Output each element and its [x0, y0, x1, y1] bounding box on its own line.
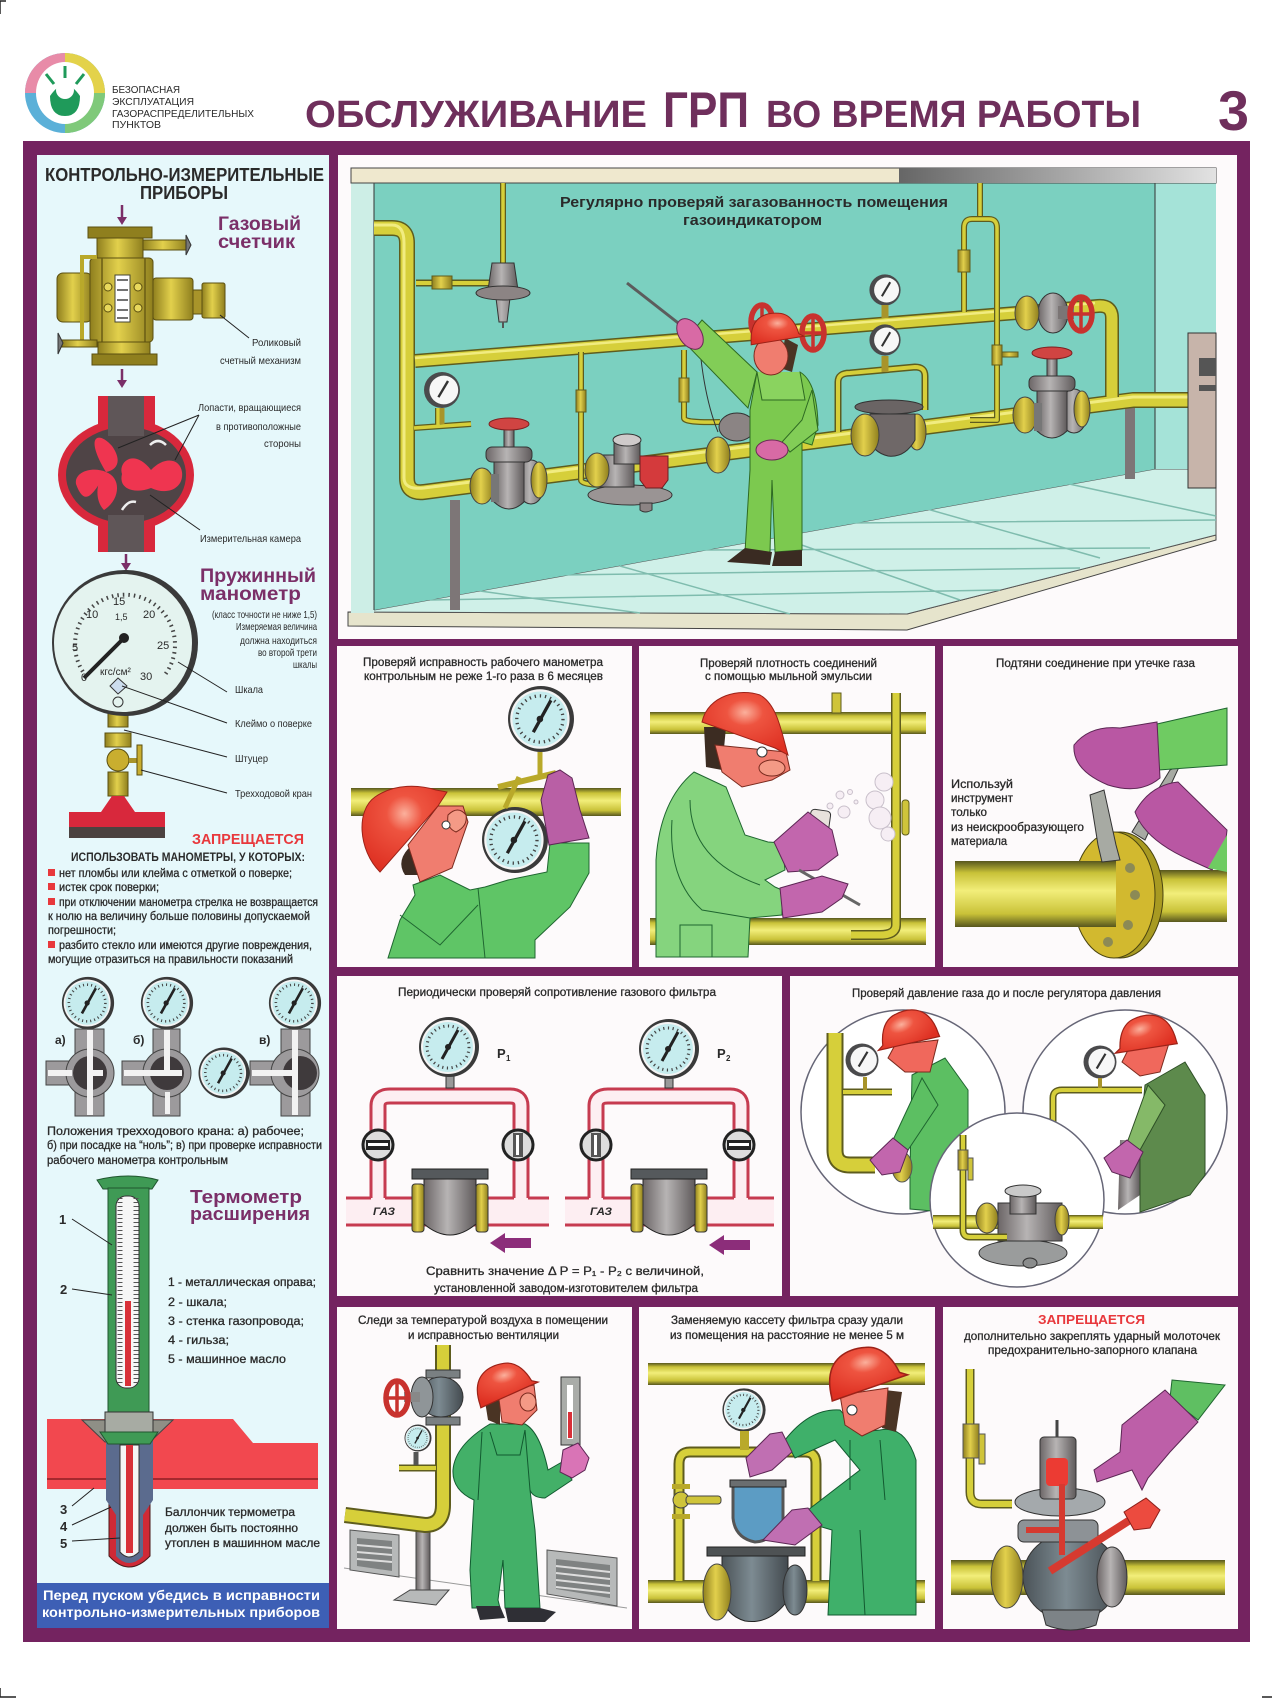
text: tool note: только — [951, 805, 987, 819]
icon: gas meter — [57, 205, 225, 388]
text: hammer rule: предохранительно-запорного клапана — [988, 1343, 1197, 1357]
callouts: gauge parts — [122, 662, 312, 800]
callouts: gauge parts: Шкала — [235, 684, 263, 696]
callouts: thermometer numbers: 2 — [60, 1282, 67, 1297]
panel: check working gauge: Проверяй исправность рабочего манометра — [363, 655, 603, 669]
text: gauge prohibition list: ИСПОЛЬЗОВАТЬ МАНОМЕТРЫ, У КОТОРЫХ: — [71, 850, 305, 864]
text: gauge prohibition list: при отключении манометра стрелка не возвращается — [59, 895, 318, 909]
callouts: thermometer numbers: 3 — [60, 1502, 67, 1517]
callout: roller counter — [220, 315, 301, 367]
floor — [348, 469, 1216, 630]
text: gauge class note: во второй трети — [258, 647, 317, 659]
text: tool note: инструмент — [951, 791, 1013, 805]
callout: measuring chamber — [150, 495, 301, 545]
diagram: filter before: 1 — [506, 1054, 511, 1063]
text: tool note: из неискрообразующего — [951, 820, 1084, 834]
poster number: 3 — [1218, 79, 1249, 142]
text: gauge class note: должна находиться — [240, 635, 317, 647]
diagram: filter before: P — [497, 1046, 506, 1061]
main title: ОБСЛУЖИВАНИЕ — [305, 94, 647, 136]
ceiling beam — [351, 168, 1216, 183]
heading: gas meter: Газовый — [218, 214, 301, 235]
icon: spring pressure gauge: 25 — [157, 640, 169, 652]
text: gauge prohibition list — [48, 850, 318, 966]
pointing hand — [1094, 1380, 1225, 1490]
panel: check working gauge — [337, 646, 632, 967]
heading: instruments — [45, 165, 324, 203]
soap foam — [827, 773, 895, 841]
text: valve positions — [47, 1124, 322, 1167]
callout: rotating lobes: в противоположные — [216, 421, 301, 433]
diagram: filter after: P — [717, 1046, 726, 1061]
heading: spring gauge: Пружинный — [200, 566, 316, 587]
chart: expansion thermometer — [47, 1176, 318, 1567]
text: thermometer note: утоплен в машинном масле — [165, 1536, 320, 1550]
series title — [112, 84, 254, 131]
safety shutoff valve — [991, 1420, 1160, 1630]
text: gauge class note — [212, 609, 317, 671]
icon: flange and regulator on right — [706, 400, 926, 473]
pipes — [650, 693, 926, 945]
heading: scene instruction: Регулярно проверяй загазованность помещения — [560, 194, 948, 211]
panel: temperature and ventilation — [337, 1307, 632, 1629]
panel: regulator pressure check: Проверяй давление газа до и после регулятора давления — [852, 986, 1161, 1000]
panel: instruments — [37, 155, 329, 1628]
series title: ЭКСПЛУАТАЦИЯ — [112, 96, 194, 108]
legend: thermometer parts: 4 - гильза; — [168, 1333, 229, 1347]
worker with gas indicator — [627, 283, 818, 566]
icon: regulator with red cap — [585, 434, 672, 512]
flanged pipe — [955, 832, 1227, 958]
panel: soap leak test: Проверяй плотность соединений — [700, 656, 877, 670]
callout: roller counter: счетный механизм — [220, 355, 301, 367]
diagram: filter after — [565, 1019, 774, 1255]
icon: gate valves — [470, 347, 1090, 509]
main title: ВО ВРЕМЯ РАБОТЫ — [766, 94, 1141, 136]
text: gauge class note: шкалы — [293, 659, 317, 671]
panel: temperature and ventilation: Следи за температурой воздуха в помещении — [358, 1313, 608, 1327]
diagram: filter before: ГАЗ — [373, 1206, 395, 1218]
text: thermometer note: должен быть постоянно — [165, 1521, 298, 1535]
pipes — [648, 1363, 925, 1603]
callout: roller counter: Роликовый — [252, 337, 301, 349]
heading: spring gauge — [200, 566, 316, 605]
text: compare formula: Сравнить значение Δ P = P₁ - P₂ с величиной, — [426, 1264, 704, 1278]
icon: wall gauges — [424, 274, 901, 424]
legend: thermometer parts: 1 - металлическая оправа; — [168, 1275, 316, 1289]
inset: worker left — [801, 1002, 1005, 1214]
text: valve positions: Положения трехходового крана: а) рабочее; — [47, 1124, 304, 1138]
pipe — [351, 788, 621, 816]
main title — [305, 82, 1141, 138]
text: compare formula — [426, 1264, 704, 1295]
electrical cabinet — [1188, 333, 1216, 488]
text: hammer rule: дополнительно закреплять ударный молоточек — [964, 1329, 1221, 1343]
worker — [656, 692, 860, 957]
inset: worker right — [1023, 1008, 1227, 1214]
text: tool note: материала — [951, 834, 1007, 848]
callout: blue note: Перед пуском убедись в исправности — [43, 1588, 320, 1603]
main title: ГРП — [663, 82, 749, 138]
icon: three-way valve c with control gauge — [198, 977, 321, 1116]
panel: replace filter cassette: Заменяемую кассету фильтра сразу удали — [671, 1313, 903, 1327]
callout: measuring chamber: Измерительная камера — [200, 533, 301, 545]
text: gauge prohibition list: истек срок поверки; — [59, 880, 159, 894]
text: gauge class note: (класс точности не ниже 1,5) — [212, 609, 317, 621]
text: gauge class note: Измеряемая величина — [236, 621, 317, 633]
warning heading: ЗАПРЕЩАЕТСЯ — [192, 831, 304, 848]
text: thermometer note: Баллончик термометра — [165, 1505, 295, 1519]
icon: gauges and fitting — [482, 686, 574, 873]
heading: instruments: КОНТРОЛЬНО-ИЗМЕРИТЕЛЬНЫЕ — [45, 165, 324, 185]
heading: thermometer: расширения — [190, 1204, 310, 1224]
icon: spring pressure gauge — [52, 570, 198, 838]
icon: spring pressure gauge: кгс/см² — [100, 667, 131, 678]
series title: БЕЗОПАСНАЯ — [112, 84, 180, 96]
text: gauge prohibition list: разбито стекло или имеются другие повреждения, — [59, 938, 312, 952]
panel: room scene — [338, 155, 1237, 639]
callout: blue note — [37, 1583, 329, 1628]
series title: ГАЗОРАСПРЕДЕЛИТЕЛЬНЫХ — [112, 108, 254, 120]
worker — [362, 770, 589, 958]
text: valve positions: рабочего манометра контрольным — [47, 1153, 228, 1167]
panel: prohibition hammer — [943, 1307, 1238, 1630]
callouts: thermometer numbers: 1 — [59, 1212, 66, 1227]
icon: spring pressure gauge: 5 — [72, 642, 78, 654]
callouts: thermometer numbers: 5 — [60, 1536, 67, 1551]
heading: scene instruction — [560, 194, 948, 229]
text: gauge prohibition list: к нолю на величину больше половины допускаемой — [48, 909, 310, 923]
legend: thermometer parts: 3 - стенка газопровода; — [168, 1314, 304, 1328]
icon: three-way valve a — [46, 977, 114, 1116]
heading: instruments: ПРИБОРЫ — [140, 183, 228, 203]
callout: rotating lobes — [118, 402, 301, 460]
series title: ПУНКТОВ — [112, 119, 161, 131]
callout: blue note: контрольно-измерительных приборов — [42, 1605, 320, 1620]
wrench and hands — [1074, 708, 1227, 872]
callouts: gauge parts: Трехходовой кран — [235, 788, 312, 800]
filter cassette — [730, 1480, 786, 1542]
ventilation grilles — [344, 1530, 627, 1608]
diagram: filter before — [346, 1017, 549, 1253]
heading: thermometer — [190, 1187, 310, 1224]
panel: tighten connection: Подтяни соединение при утечке газа — [996, 656, 1195, 670]
heading: thermometer: Термометр — [190, 1187, 302, 1207]
text: thermometer note — [165, 1505, 320, 1550]
callout: rotating lobes: стороны — [264, 438, 301, 450]
icon: three-way valve a: а) — [55, 1033, 66, 1047]
legend: thermometer parts: 5 - машинное масло — [168, 1352, 286, 1366]
panel: soap leak test — [639, 646, 935, 967]
callouts: gauge parts: Клеймо о поверке — [235, 718, 312, 730]
wall — [351, 183, 1216, 613]
panel: filter resistance — [337, 976, 782, 1296]
diagram: filter after: 2 — [726, 1054, 731, 1063]
text: compare formula: установленной заводом-изготовителем фильтра — [434, 1281, 698, 1295]
heading: spring gauge: манометр — [200, 584, 301, 605]
panel: tighten connection — [943, 646, 1238, 967]
icon: spring pressure gauge: 1,5 — [115, 612, 128, 622]
worker with thermometer — [453, 1356, 589, 1622]
callout: rotating lobes: Лопасти, вращающиеся — [198, 402, 301, 414]
gas pipes — [374, 183, 1188, 492]
icon: line regulator top left — [476, 263, 530, 328]
panel: check working gauge: контрольным не реже 1-го раза в 6 месяцев — [364, 669, 603, 683]
text: hammer rule — [964, 1329, 1221, 1357]
text: gauge prohibition list: могущие отразиться на правильности показаний — [48, 952, 293, 966]
icon: spring pressure gauge: 15 — [113, 596, 125, 608]
callouts: gauge parts: Штуцер — [235, 753, 268, 765]
pipe with valve — [345, 1345, 463, 1605]
text: tool note: Используй — [951, 777, 1013, 791]
panel: temperature and ventilation: и исправностью вентиляции — [408, 1328, 559, 1342]
panel: replace filter cassette: из помещения на расстояние не менее 5 м — [670, 1328, 904, 1342]
heading: gas meter: счетчик — [218, 232, 296, 253]
logo — [25, 53, 105, 133]
icon: spring pressure gauge: 20 — [143, 609, 155, 621]
icon: three-way valve b — [122, 977, 193, 1116]
legend: thermometer parts — [168, 1275, 316, 1366]
diagram: filter after: ГАЗ — [590, 1206, 612, 1218]
panel: soap leak test: с помощью мыльной эмульсии — [705, 669, 872, 683]
text: tool note — [951, 777, 1084, 848]
text: gauge prohibition list: погрешности; — [48, 923, 116, 937]
icon: valve on upper pipe — [751, 293, 1092, 350]
inset: regulator — [930, 1113, 1104, 1287]
icon: rotary chamber — [58, 396, 194, 571]
warning heading: ЗАПРЕЩАЕТСЯ — [1038, 1313, 1145, 1327]
pipes — [951, 1369, 1225, 1595]
heading: gas meter — [218, 214, 301, 253]
callouts: thermometer numbers — [59, 1212, 120, 1551]
icon: three-way valve b: б) — [133, 1033, 144, 1047]
panel: filter resistance: Периодически проверяй сопротивление газового фильтра — [398, 985, 716, 999]
icon: spring pressure gauge: 10 — [86, 609, 98, 621]
filter body — [703, 1547, 807, 1622]
icon: spring pressure gauge: 0 — [81, 672, 87, 684]
callouts: thermometer numbers: 4 — [60, 1519, 68, 1534]
text: gauge prohibition list: нет пломбы или клейма с отметкой о поверке; — [59, 866, 292, 880]
worker — [746, 1341, 916, 1615]
icon: three-way valve c with control gauge: в) — [259, 1033, 270, 1047]
panel: regulator pressure check — [790, 976, 1238, 1296]
icon: spring pressure gauge: 30 — [140, 671, 152, 683]
heading: scene instruction: газоиндикатором — [683, 212, 822, 229]
legend: thermometer parts: 2 - шкала; — [168, 1295, 227, 1309]
text: valve positions: б) при посадке на “ноль”; в) при проверке исправности — [47, 1138, 322, 1152]
pipe supports — [455, 407, 1130, 610]
panel: replace filter cassette — [639, 1307, 935, 1629]
